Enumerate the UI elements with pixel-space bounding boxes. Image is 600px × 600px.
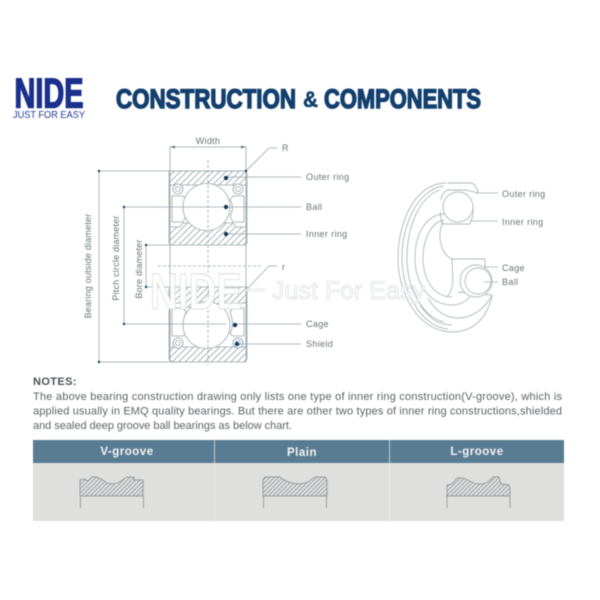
width arrowheads <box>170 146 246 148</box>
dimension labels: Outer ring <box>306 172 350 182</box>
notes text: The above bearing construction drawing only lists one type of inner ring construction(V-groove), which is <box>33 391 562 403</box>
lower half section <box>169 287 247 362</box>
profile: L-groove <box>447 477 510 508</box>
title <box>116 85 481 114</box>
dimension labels: Cage <box>306 319 329 329</box>
dimension labels: Bore diameter <box>134 239 144 299</box>
profile: Plain <box>263 477 327 508</box>
title: & <box>303 87 318 113</box>
part labels: Outer ring <box>502 189 546 199</box>
notes text: applied usually in EMQ quality bearings. But there are other two types of inner ring constructions,shielded <box>33 406 562 418</box>
dimension labels: Ball <box>306 202 322 212</box>
cross-section drawing of bearing <box>83 136 350 366</box>
table header: Plain <box>287 447 317 459</box>
dimension labels: Inner ring <box>306 229 348 239</box>
dimension and centre lines <box>99 147 301 366</box>
logo: NIDE: NIDE <box>14 70 84 117</box>
part labels: Cage <box>502 263 525 273</box>
marker dots <box>98 170 247 363</box>
table: inner ring types <box>33 440 564 521</box>
title: COMPONENTS <box>324 85 481 114</box>
notes text <box>33 376 562 432</box>
notes text: NOTES: <box>33 376 77 388</box>
watermark: NIDE <box>150 263 242 320</box>
table header: V-groove <box>100 446 154 458</box>
part labels: Inner ring <box>502 217 544 227</box>
dimension labels: Width <box>196 136 220 146</box>
watermark <box>150 263 425 320</box>
balls and cage <box>443 192 492 297</box>
watermark: Just For Easy <box>272 277 425 305</box>
dimension labels: r <box>282 262 285 272</box>
dimension labels: R <box>282 143 289 153</box>
dimension labels: Shield <box>306 339 333 349</box>
leader lines <box>470 193 498 282</box>
notes text: and sealed deep groove ball bearings as below chart. <box>33 420 292 432</box>
table header: L-groove <box>450 446 504 458</box>
upper half section <box>169 171 247 245</box>
part labels <box>502 189 546 287</box>
logo: NIDE: JUST FOR EASY <box>13 110 85 121</box>
dimension labels: Bearing outside diameter <box>83 214 93 318</box>
table header <box>33 440 564 521</box>
dimension labels: Pitch circle diameter <box>111 215 121 301</box>
title: CONSTRUCTION <box>116 85 296 114</box>
part labels: Ball <box>502 277 518 287</box>
perspective drawing of bearing <box>398 183 546 332</box>
profile: V-groove <box>80 477 144 508</box>
dimension labels <box>83 136 350 349</box>
